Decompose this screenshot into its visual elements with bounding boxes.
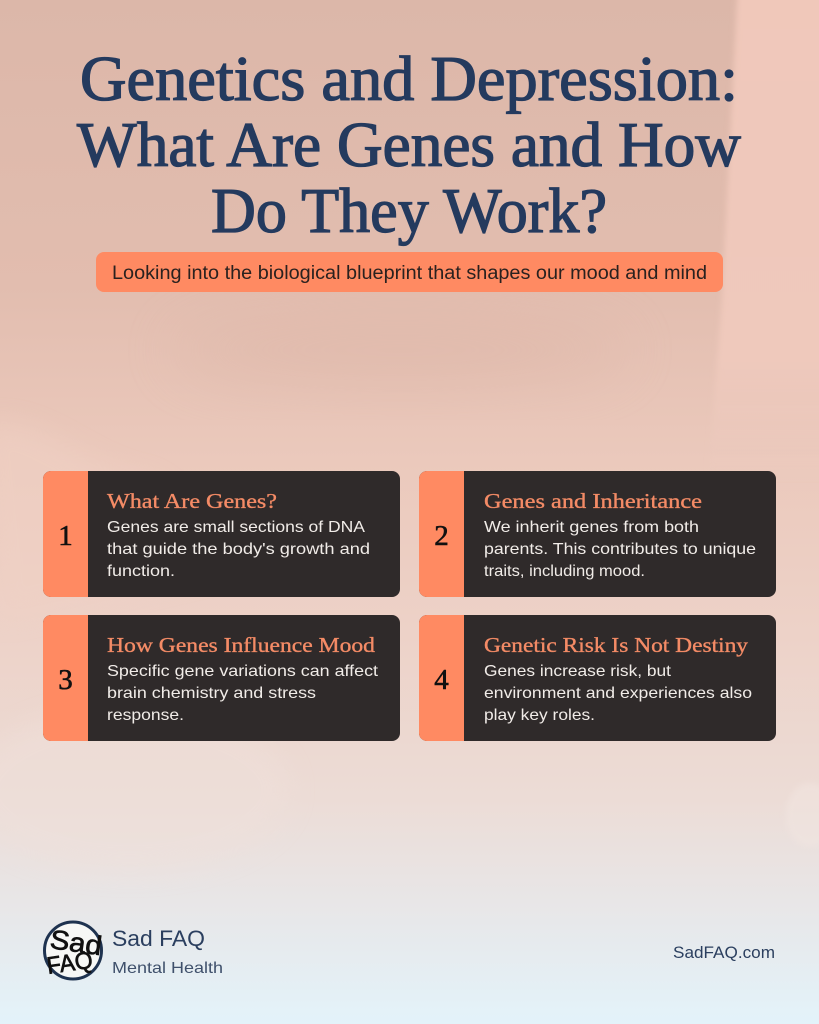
- card 4: Genetic Risk Is Not Destiny: play key roles.: [484, 707, 595, 724]
- logo: Sad FAQ: FAQ: [45, 947, 94, 980]
- card 2: Genes and Inheritance: traits, including mood.: [484, 563, 645, 580]
- card 4: Genetic Risk Is Not Destiny: environment and experiences also: [484, 685, 752, 702]
- card 2: Genes and Inheritance: parents. This contributes to unique: [484, 541, 756, 558]
- card 3: How Genes Influence Mood: brain chemistry and stress: [107, 685, 316, 702]
- card 2: Genes and Inheritance: [419, 471, 776, 597]
- title: [77, 44, 741, 246]
- card 1: What Are Genes?: What Are Genes?: [107, 489, 277, 513]
- brand name: Mental Health: [112, 960, 223, 977]
- brand name: Sad FAQ: [112, 926, 205, 951]
- card 2: Genes and Inheritance: Genes and Inheritance: [484, 489, 702, 513]
- title: Do They Work?: [211, 176, 607, 246]
- card 3: How Genes Influence Mood: Specific gene variations can affect: [107, 663, 379, 680]
- card 1: What Are Genes?: [43, 471, 400, 597]
- card 1: What Are Genes?: 1: [58, 520, 73, 552]
- logo: Sad FAQ: [44, 922, 104, 980]
- card 3: How Genes Influence Mood: [43, 615, 400, 741]
- title: Genetics and Depression:: [80, 44, 738, 114]
- card 1: What Are Genes?: that guide the body's growth and: [107, 541, 370, 558]
- subtitle pill: Looking into the biological blueprint that shapes our mood and mind: [112, 263, 707, 284]
- card 3: How Genes Influence Mood: 3: [58, 664, 73, 696]
- card 1: What Are Genes?: function.: [107, 563, 175, 580]
- card 4: Genetic Risk Is Not Destiny: 4: [434, 664, 449, 696]
- card 2: Genes and Inheritance: 2: [434, 520, 449, 552]
- card 4: Genetic Risk Is Not Destiny: Genetic Risk Is Not Destiny: [484, 633, 749, 657]
- card 3: How Genes Influence Mood: response.: [107, 707, 184, 724]
- card 1: What Are Genes?: Genes are small sections of DNA: [107, 519, 365, 536]
- card 3: How Genes Influence Mood: How Genes Influence Mood: [107, 633, 376, 657]
- logo: Sad FAQ: Sad: [48, 924, 104, 961]
- brand name: [112, 926, 223, 977]
- title: What Are Genes and How: [77, 110, 741, 180]
- card 2: Genes and Inheritance: We inherit genes from both: [484, 519, 699, 536]
- website: SadFAQ.com: [673, 943, 775, 962]
- card 4: Genetic Risk Is Not Destiny: Genes increase risk, but: [484, 663, 672, 680]
- card 4: Genetic Risk Is Not Destiny: [419, 615, 776, 741]
- subtitle pill: [96, 252, 723, 292]
